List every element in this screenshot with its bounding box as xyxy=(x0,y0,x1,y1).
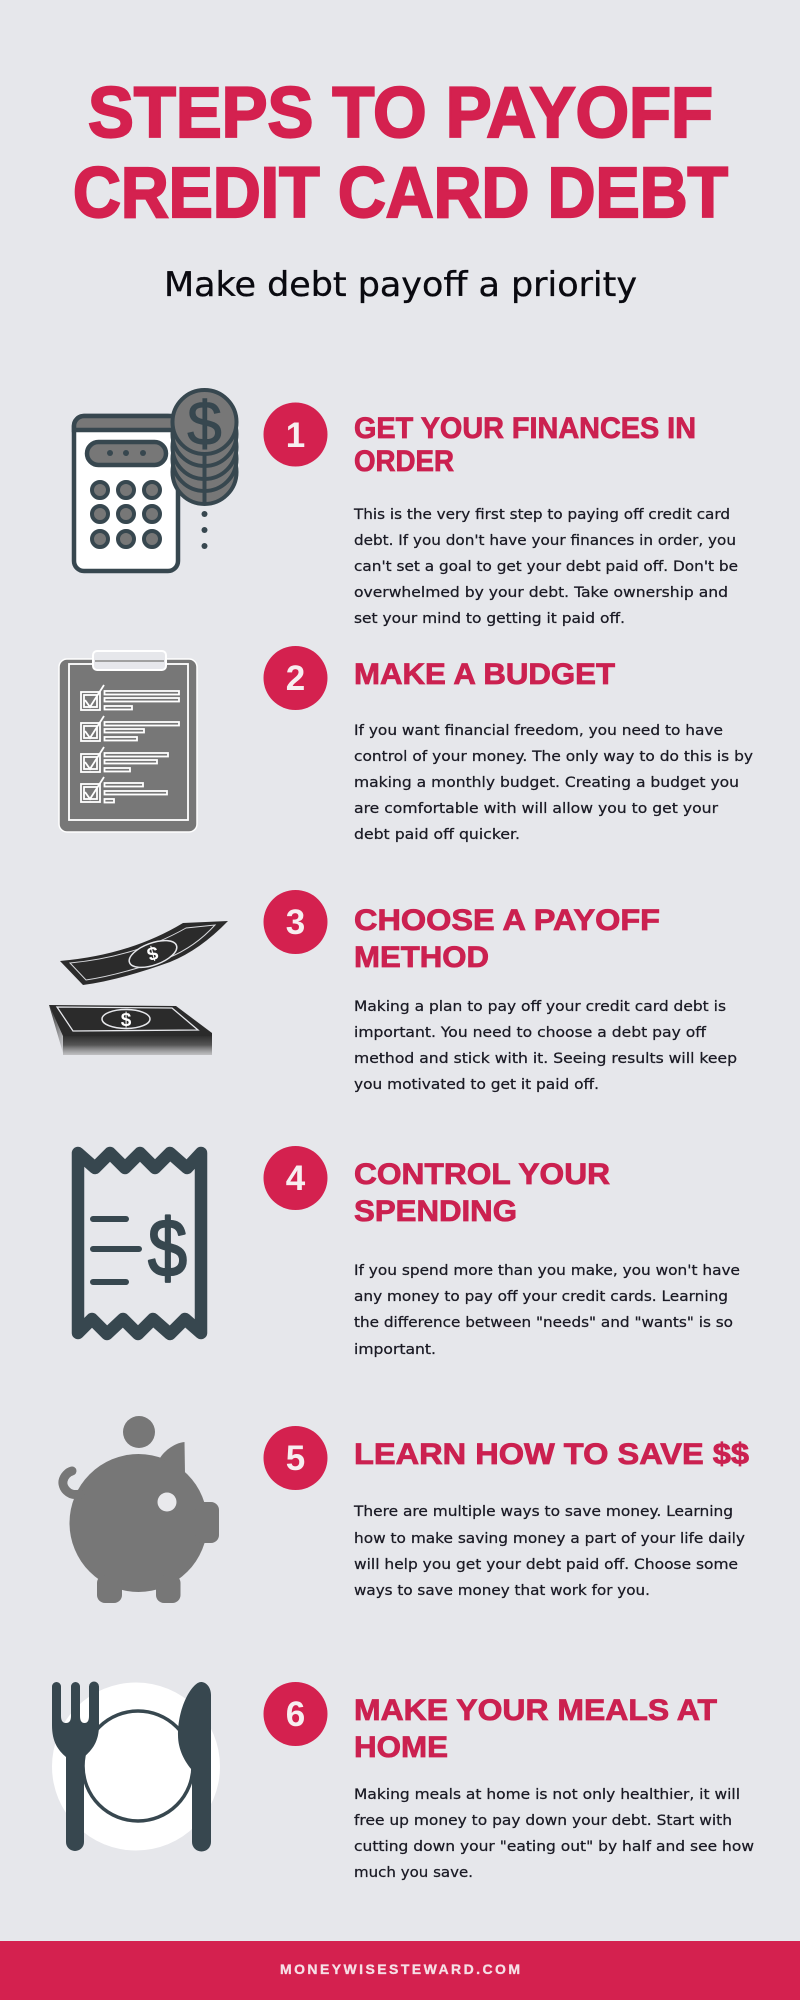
title: STEPS TO PAYOFF xyxy=(88,74,713,153)
heading 4: SPENDING xyxy=(354,1195,517,1228)
heading 1: GET YOUR FINANCES IN xyxy=(354,412,696,445)
badge 2: 2 xyxy=(286,659,305,698)
heading 6 xyxy=(354,1694,717,1764)
body text 2: making a monthly budget. Creating a budget you xyxy=(354,775,739,791)
body text 4 xyxy=(354,1263,740,1358)
badge 1: 1 xyxy=(286,416,305,455)
heading 1 xyxy=(354,412,696,478)
body text 6: much you save. xyxy=(354,1865,473,1881)
body text 6 xyxy=(354,1787,754,1881)
subtitle: Make debt payoff a priority xyxy=(164,265,637,305)
badge 5: 5 xyxy=(286,1439,305,1478)
body text 2: are comfortable with will allow you to get your xyxy=(354,801,718,817)
icon: piggy bank xyxy=(63,1416,219,1603)
body text 1: This is the very first step to paying off credit card xyxy=(353,507,730,523)
icon: calculator and coins xyxy=(74,390,236,571)
body text 1: set your mind to getting it paid off. xyxy=(354,611,625,627)
body text 3 xyxy=(354,999,737,1093)
body text 4: the difference between "needs" and "wants" is so xyxy=(354,1315,733,1331)
heading 3 xyxy=(354,904,660,974)
body text 5: ways to save money that work for you. xyxy=(354,1583,650,1599)
body text 2: control of your money. The only way to do this is by xyxy=(354,749,753,765)
title: CREDIT CARD DEBT xyxy=(73,154,728,233)
body text 6: free up money to pay down your debt. Start with xyxy=(354,1813,732,1829)
body text 6: Making meals at home is not only healthier, it will xyxy=(354,1787,740,1803)
panel: step 2 xyxy=(59,646,753,843)
icon: dollar bills: $ xyxy=(121,1010,132,1031)
badge 2 xyxy=(264,646,328,710)
badge 4 xyxy=(264,1146,328,1210)
title xyxy=(73,74,728,233)
panel: step 6 xyxy=(52,1682,754,1881)
heading 2: MAKE A BUDGET xyxy=(354,658,615,691)
body text 5: There are multiple ways to save money. Learning xyxy=(353,1504,733,1520)
badge 5 xyxy=(264,1426,328,1490)
icon: dollar bills xyxy=(49,921,228,1055)
footer band: MONEYWISESTEWARD.COM xyxy=(280,1961,520,1977)
heading 1: ORDER xyxy=(354,445,454,478)
body text 5 xyxy=(353,1504,745,1599)
body text 5: will help you get your debt paid off. Choose some xyxy=(354,1557,738,1573)
body text 6: cutting down your "eating out" by half and see how xyxy=(354,1839,754,1855)
heading 6: MAKE YOUR MEALS AT xyxy=(354,1694,717,1727)
badge 1 xyxy=(264,402,328,466)
badge 6 xyxy=(264,1682,328,1746)
icon: plate with fork and knife xyxy=(52,1682,220,1852)
icon: dollar bills: $ xyxy=(144,941,160,964)
badge 6: 6 xyxy=(286,1695,305,1734)
body text 2 xyxy=(354,723,753,843)
icon: calculator and coins: $ xyxy=(187,390,222,459)
panel: step 3 xyxy=(49,890,737,1093)
icon: clipboard checklist xyxy=(59,651,197,832)
body text 1 xyxy=(353,507,738,627)
badge 3 xyxy=(264,890,328,954)
body text 4: any money to pay off your credit cards. Learning xyxy=(354,1289,728,1305)
badge 3: 3 xyxy=(286,903,305,942)
body text 3: method and stick with it. Seeing results will keep xyxy=(354,1051,737,1067)
body text 3: important. You need to choose a debt pay off xyxy=(354,1025,707,1041)
body text 2: debt paid off quicker. xyxy=(354,827,520,843)
heading 3: METHOD xyxy=(354,941,489,974)
panel: step 5 xyxy=(63,1416,749,1603)
body text 1: debt. If you don't have your finances in order, you xyxy=(354,533,736,549)
panel: step 1 xyxy=(74,390,738,627)
badge 4: 4 xyxy=(286,1159,306,1198)
body text 5: how to make saving money a part of your life daily xyxy=(354,1531,745,1547)
footer band xyxy=(0,1941,800,2000)
body text 3: Making a plan to pay off your credit card debt is xyxy=(354,999,726,1015)
heading 4: CONTROL YOUR xyxy=(354,1158,610,1191)
body text 1: can't set a goal to get your debt paid off. Don't be xyxy=(354,559,738,575)
heading 6: HOME xyxy=(354,1731,448,1764)
body text 1: overwhelmed by your debt. Take ownership and xyxy=(354,585,728,601)
heading 3: CHOOSE A PAYOFF xyxy=(354,904,660,937)
icon: receipt xyxy=(78,1153,201,1334)
body text 3: you motivated to get it paid off. xyxy=(354,1077,599,1093)
heading 5: LEARN HOW TO SAVE $$ xyxy=(354,1438,749,1471)
body text 2: If you want financial freedom, you need to have xyxy=(354,723,723,739)
heading 4 xyxy=(354,1158,610,1228)
body text 4: important. xyxy=(354,1342,436,1358)
panel: step 4 xyxy=(78,1146,740,1358)
icon: receipt: $ xyxy=(148,1203,187,1294)
body text 4: If you spend more than you make, you won't have xyxy=(354,1263,740,1279)
